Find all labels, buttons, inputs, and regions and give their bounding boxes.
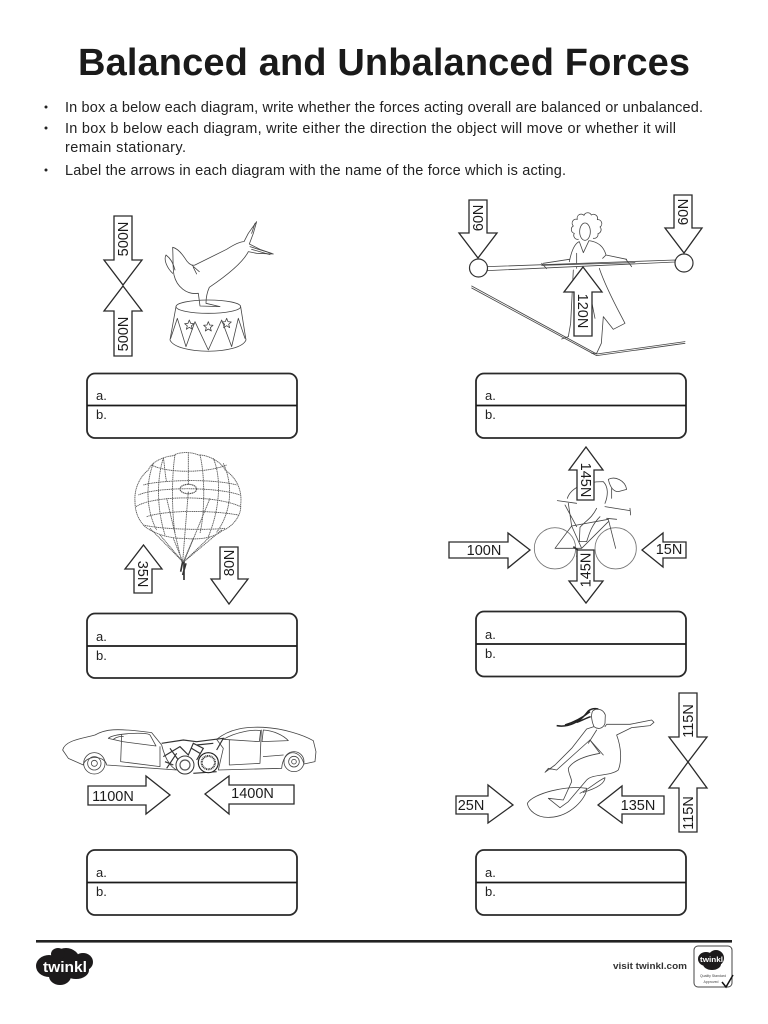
instructions text block: remain stationary. xyxy=(65,140,186,156)
arrow: 135N left: 135N xyxy=(621,798,655,814)
arrow: 80N down: 80N xyxy=(222,550,238,576)
arrow: 500N up: 500N xyxy=(116,317,132,351)
answer box: surfer: b. xyxy=(485,884,496,899)
pole weight: left xyxy=(470,259,488,277)
answer box: cars xyxy=(87,850,297,915)
arrow: 15N left xyxy=(642,533,686,567)
arrow: 100N right xyxy=(449,533,530,568)
diagram: surfer xyxy=(456,693,707,832)
arrow: 60N left xyxy=(459,200,497,258)
answer box: seal: a. xyxy=(96,388,107,403)
illustration: surfer xyxy=(527,709,654,817)
twinkl logo xyxy=(36,948,93,985)
instructions text block xyxy=(44,100,703,179)
title: Balanced and Unbalanced Forces xyxy=(78,42,690,84)
diagram: cyclist xyxy=(449,447,686,603)
arrow: 1400N left xyxy=(205,776,294,814)
pole weight: right xyxy=(675,254,693,272)
arrow: 115N down: 115N xyxy=(681,704,697,738)
website link: visit twinkl.com xyxy=(613,961,687,972)
illustration: cyclist xyxy=(534,478,636,569)
answer box: tightrope: a. xyxy=(485,388,496,403)
diagram: tightrope walker xyxy=(459,195,702,356)
quality badge: Approved xyxy=(704,980,719,984)
arrow: 500N down xyxy=(104,216,142,285)
instructions text block: In box b below each diagram, write either the direction the object will move or whether it will xyxy=(65,121,676,137)
arrow: 115N up xyxy=(669,762,707,832)
arrow: 80N down xyxy=(211,547,248,604)
illustration: tightrope walker xyxy=(472,213,685,356)
arrow: 145N up: 145N xyxy=(577,463,593,497)
illustration: crashing cars xyxy=(63,727,316,774)
arrow: 145N down: 145N xyxy=(578,553,594,587)
arrow: 500N down: 500N xyxy=(116,222,132,256)
arrow: 15N left: 15N xyxy=(656,542,682,558)
arrow: 100N right: 100N xyxy=(467,543,501,559)
arrow: 500N up xyxy=(104,286,142,356)
arrow: 25N right: 25N xyxy=(458,798,484,814)
answer box: cars: a. xyxy=(96,865,107,880)
diagram: car crash xyxy=(63,727,316,814)
twinkl logo: twinkl xyxy=(43,959,87,976)
answer box: parachute xyxy=(87,614,297,678)
answer box: surfer xyxy=(476,850,686,915)
answer box: parachute: a. xyxy=(96,629,107,644)
arrow: 135N left xyxy=(598,786,664,823)
answer box: cyclist xyxy=(476,612,686,676)
answer box: seal: b. xyxy=(96,407,107,422)
answer box: seal xyxy=(87,374,297,438)
instructions text block: In box a below each diagram, write whether the forces acting overall are balanced or unbalanced. xyxy=(65,100,703,116)
answer box: tightrope: b. xyxy=(485,407,496,422)
arrow: 115N up: 115N xyxy=(681,796,697,830)
arrow: 120N up xyxy=(564,267,602,336)
illustration: parachute xyxy=(135,453,241,580)
arrow: 25N right xyxy=(456,785,513,823)
arrow: 1100N right xyxy=(88,776,170,814)
quality badge: Quality Standard xyxy=(700,974,726,978)
quality badge: twinkl xyxy=(700,957,723,964)
arrow: 145N up xyxy=(569,447,603,500)
answer box: surfer: a. xyxy=(485,865,496,880)
arrow: 145N down xyxy=(569,550,603,603)
arrow: 1400N left: 1400N xyxy=(231,786,274,802)
arrow: 60N right: 60N xyxy=(676,199,692,225)
answer box: cars: b. xyxy=(96,884,107,899)
answer box: cyclist: b. xyxy=(485,646,496,661)
arrow: 60N right xyxy=(665,195,702,253)
arrow: 120N up: 120N xyxy=(574,294,590,328)
diagram: seal on podium xyxy=(104,216,273,356)
answer box: parachute: b. xyxy=(96,648,107,663)
arrow: 60N left: 60N xyxy=(471,205,487,231)
answer box: cyclist: a. xyxy=(485,627,496,642)
arrow: 1100N right: 1100N xyxy=(92,789,134,805)
answer box: tightrope xyxy=(476,374,686,438)
diagram: parachute xyxy=(125,453,248,604)
arrow: 35N up: 35N xyxy=(134,561,150,587)
illustration: seal xyxy=(165,222,273,351)
arrow: 115N down xyxy=(669,693,707,762)
instructions text block: Label the arrows in each diagram with the name of the force which is acting. xyxy=(65,163,566,179)
quality badge xyxy=(694,946,733,987)
footer rule xyxy=(36,940,732,943)
arrow: 35N up xyxy=(125,545,162,593)
